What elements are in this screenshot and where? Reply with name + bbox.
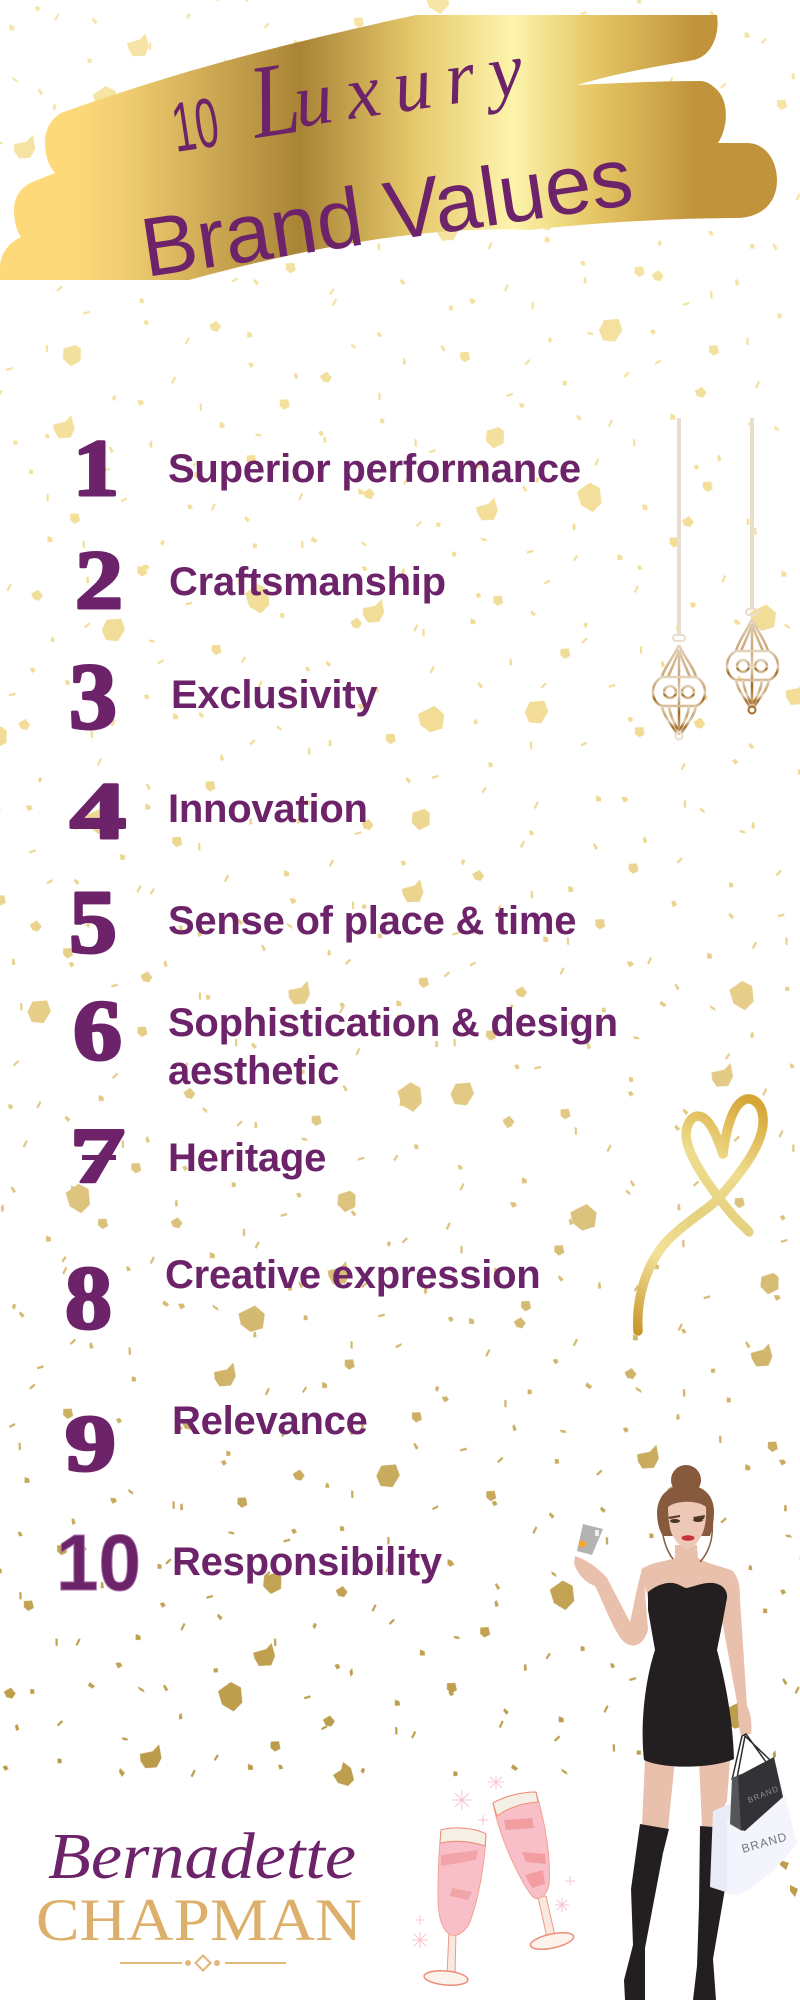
logo surname: CHAPMAN (36, 1887, 362, 1953)
item 9: Relevance (172, 1399, 368, 1443)
black shopping bag (730, 1734, 783, 1831)
item 9: 9 (65, 1400, 116, 1488)
credit card (577, 1524, 603, 1555)
item 10: Responsibility (172, 1540, 443, 1584)
title line: 10 Luxury (167, 27, 528, 167)
item 6: aesthetic (168, 1049, 339, 1093)
item 5: 5 (69, 873, 117, 972)
item 1 (73, 425, 581, 513)
face (668, 1502, 706, 1549)
illustration: woman with shopping bags (574, 1465, 797, 2000)
item 6: Sophistication & design (168, 1001, 618, 1045)
item 3: 3 (69, 645, 117, 749)
right glass (493, 1792, 575, 1952)
hair back and bun (657, 1465, 714, 1536)
item 4 (70, 768, 368, 856)
item 3: Exclusivity (171, 673, 378, 717)
item 7: 7 (70, 1112, 125, 1199)
item 1: 1 (73, 425, 119, 513)
item 7: Heritage (168, 1136, 326, 1180)
left earring (653, 418, 705, 740)
raised arm and hand (574, 1556, 648, 1646)
hair strands (662, 1518, 712, 1562)
logo ornament (120, 1954, 286, 1972)
item 6: 6 (73, 982, 122, 1078)
item 8: 8 (65, 1249, 112, 1348)
item 2: 2 (75, 534, 123, 627)
item 10 (56, 1518, 443, 1607)
boots (624, 1824, 725, 2000)
item 1: Superior performance (168, 447, 581, 491)
gold brush banner (0, 15, 777, 280)
icon: gold ribbon heart (638, 1099, 763, 1331)
item 6 (73, 982, 618, 1093)
title line: 10 Luxury: L (240, 38, 307, 161)
right earring (727, 418, 778, 714)
list of values (56, 425, 618, 1607)
item 9 (65, 1399, 368, 1488)
item 2: Craftsmanship (169, 560, 446, 604)
item 2 (75, 534, 446, 627)
white shopping bag (710, 1778, 797, 1895)
title line: 10 Luxury: uxury (288, 27, 528, 144)
item 5: Sense of place & time (168, 899, 576, 943)
item 5 (69, 873, 576, 972)
neck and shoulders (641, 1545, 733, 1600)
title line: 10 Luxury: 10 (167, 83, 224, 167)
left glass (423, 1828, 486, 1987)
legs (642, 1760, 730, 1829)
illustration: champagne glasses (412, 1775, 575, 1987)
logo script name: Bernadette (48, 1820, 356, 1893)
title line: Brand Values: Brand Values (135, 129, 638, 295)
black shopping bag: BRAND (746, 1784, 780, 1805)
item 8: Creative expression (165, 1253, 540, 1297)
item 7 (70, 1112, 326, 1199)
item 4: Innovation (168, 787, 368, 831)
item 8 (65, 1249, 540, 1348)
white shopping bag: BRAND (740, 1829, 789, 1856)
item 3 (69, 645, 378, 749)
title (135, 27, 638, 295)
black dress (643, 1583, 734, 1767)
item 10: 10 (56, 1518, 141, 1607)
lowered arm (722, 1571, 752, 1735)
icon: hanging lantern earrings (653, 418, 778, 740)
sparkles (412, 1775, 575, 1948)
logo: Bernadette Chapman (36, 1820, 362, 1972)
item 4: 4 (70, 768, 126, 856)
